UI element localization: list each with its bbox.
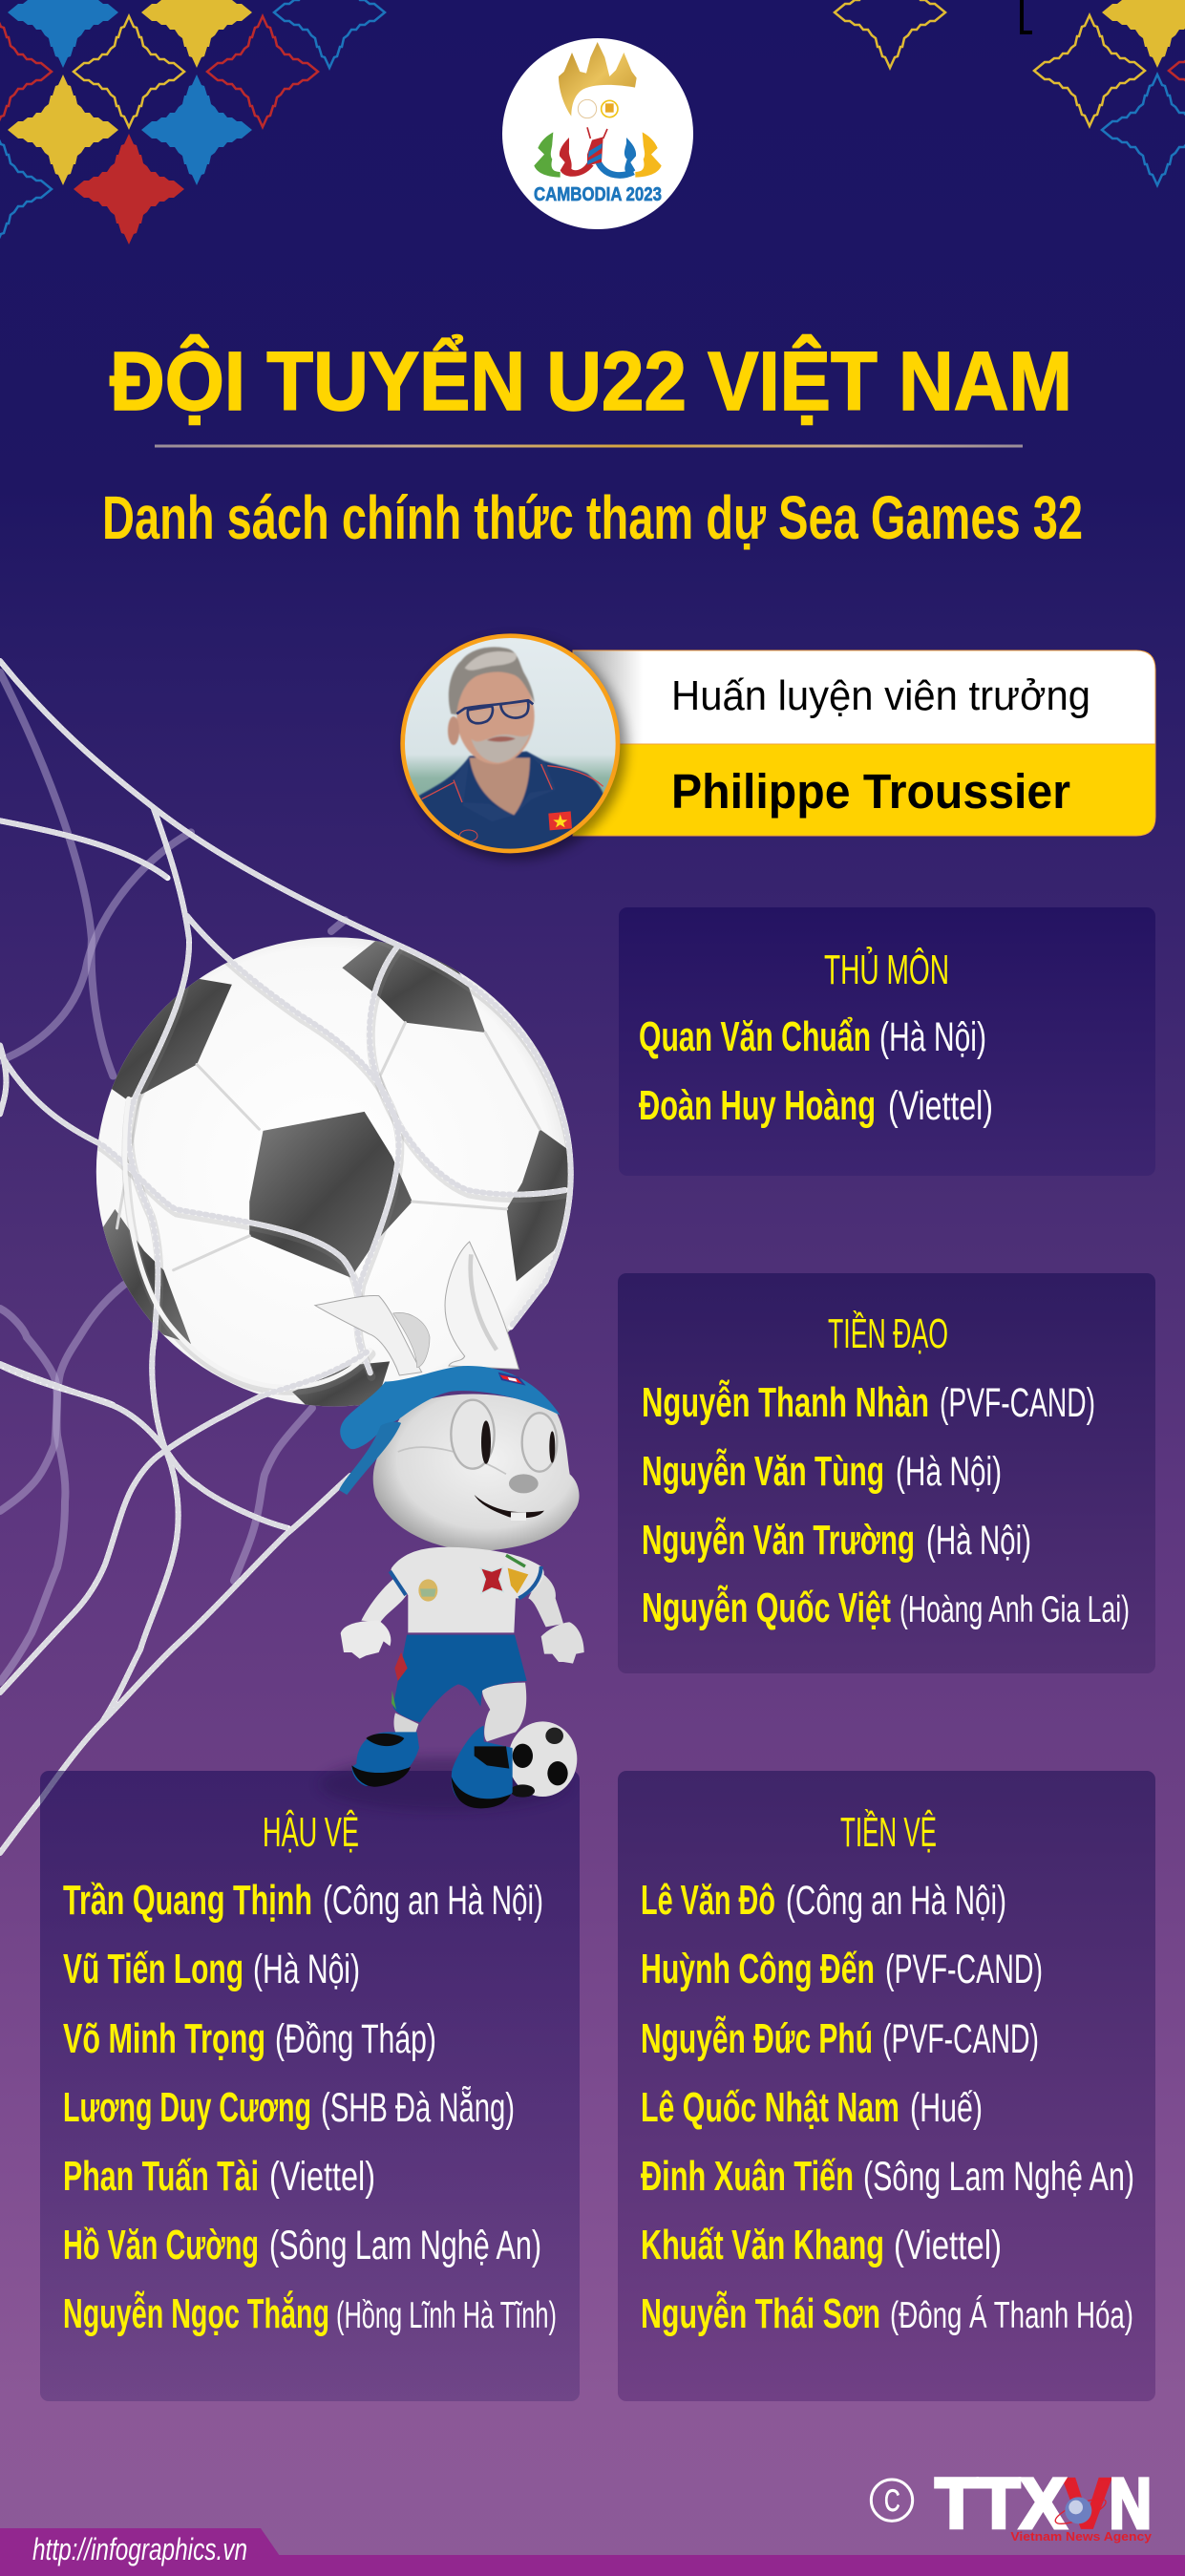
coach name text: Philippe Troussier	[671, 764, 1070, 819]
logo: TTXVN agency	[871, 2464, 1153, 2544]
decorative stars top right	[835, 0, 1185, 185]
logo: SEA Games Cambodia 2023	[502, 38, 693, 229]
player row	[641, 1877, 1006, 1924]
player row: Khuất Văn Khang	[641, 2222, 884, 2268]
mascot body	[341, 1547, 584, 1808]
player row: Hồ Văn Cường	[63, 2222, 259, 2268]
player row	[641, 2153, 1134, 2200]
player row: (Đồng Tháp)	[275, 2016, 436, 2062]
coach role text: Huấn luyện viên trưởng	[671, 672, 1090, 719]
net shadow embossed on ball	[97, 940, 567, 1395]
panel: goalkeepers	[619, 907, 1155, 1176]
coach name band	[573, 744, 1155, 836]
panel: defenders	[40, 1771, 580, 2401]
player row: (PVF-CAND)	[882, 2016, 1039, 2062]
player row: (Viettel)	[894, 2223, 1002, 2268]
footer bar	[0, 2555, 1185, 2576]
heading: forwards: TIỀN ĐẠO	[828, 1309, 948, 1357]
panel: midfielders	[618, 1771, 1155, 2401]
player row: Nguyễn Đức Phú	[641, 2014, 873, 2062]
player row: (SHB Đà Nẵng)	[321, 2085, 515, 2131]
player row: (Sông Lam Nghệ An)	[269, 2223, 541, 2268]
logo: TTXVN agency: C	[884, 2483, 900, 2518]
player row: Lương Duy Cương	[63, 2084, 311, 2131]
heading: defenders: HẬU VỆ	[263, 1809, 359, 1856]
coach portrait	[402, 635, 619, 860]
player row: (Công an Hà Nội)	[786, 1878, 1006, 1924]
player row: (Viettel)	[269, 2154, 375, 2200]
player row: Nguyễn Thái Sơn	[641, 2289, 880, 2337]
player row: (Hà Nội)	[926, 1518, 1031, 1564]
player row: Nguyễn Văn Trường	[642, 1516, 915, 1564]
player row: (Viettel)	[888, 1083, 993, 1129]
player row: (Huế)	[910, 2085, 983, 2131]
logo: TTXVN agency: N	[1110, 2464, 1152, 2544]
logo: TTXVN agency: V	[1063, 2464, 1111, 2544]
player row: Nguyễn Ngọc Thắng	[63, 2289, 329, 2337]
player row: Đinh Xuân Tiến	[641, 2153, 854, 2200]
player row: Huỳnh Công Đến	[641, 1946, 875, 1992]
player row: Võ Minh Trọng	[63, 2015, 265, 2062]
heading: goalkeepers: THỦ MÔN	[824, 945, 949, 993]
player row: (PVF-CAND)	[940, 1380, 1095, 1426]
mascot: rabbit	[315, 1242, 584, 1811]
player row: Nguyễn Thanh Nhàn	[642, 1378, 929, 1426]
coach card	[402, 635, 1155, 860]
logo: TTXVN agency: Vietnam News Agency	[1010, 2529, 1153, 2544]
decorative stars top left	[0, 0, 385, 245]
panel: forwards	[618, 1273, 1155, 1673]
faded back net	[0, 672, 345, 1682]
player row: (Hà Nội)	[896, 1449, 1002, 1495]
player row	[63, 2222, 541, 2268]
title divider	[155, 445, 1023, 447]
front net	[0, 661, 571, 1853]
player row: (PVF-CAND)	[885, 1947, 1043, 1992]
football	[95, 937, 568, 1406]
player row: (Hồng Lĩnh Hà Tĩnh)	[336, 2295, 557, 2336]
coach label band	[573, 650, 1155, 744]
player row: Lê Quốc Nhật Nam	[641, 2084, 899, 2131]
logo: SEA Games Cambodia 2023: CAMBODIA 2023	[534, 183, 662, 205]
heading: midfielders: TIỀN VỆ	[840, 1808, 937, 1856]
player row	[641, 2289, 1133, 2337]
footer url tab	[0, 2528, 280, 2566]
player row: Nguyễn Văn Tùng	[642, 1447, 884, 1495]
player row: Lê Văn Đô	[641, 1877, 775, 1924]
player row: Nguyễn Quốc Việt	[642, 1584, 891, 1631]
player row: (Công an Hà Nội)	[323, 1878, 543, 1924]
player row: (Hà Nội)	[879, 1014, 986, 1060]
player row: Vũ Tiến Long	[63, 1946, 243, 1992]
player row: Phan Tuấn Tài	[63, 2153, 259, 2200]
website text: http://infographics.vn	[32, 2532, 247, 2566]
player row: Đoàn Huy Hoàng	[639, 1082, 876, 1129]
player row: Trần Quang Thịnh	[63, 1877, 312, 1924]
player row: Quan Văn Chuẩn	[639, 1013, 871, 1060]
player row: (Hà Nội)	[253, 1947, 360, 1992]
logo: TTXVN agency: TTX	[935, 2464, 1067, 2544]
title: ĐỘI TUYỂN U22 VIỆT NAM	[110, 335, 1072, 428]
mascot head	[315, 1242, 580, 1551]
